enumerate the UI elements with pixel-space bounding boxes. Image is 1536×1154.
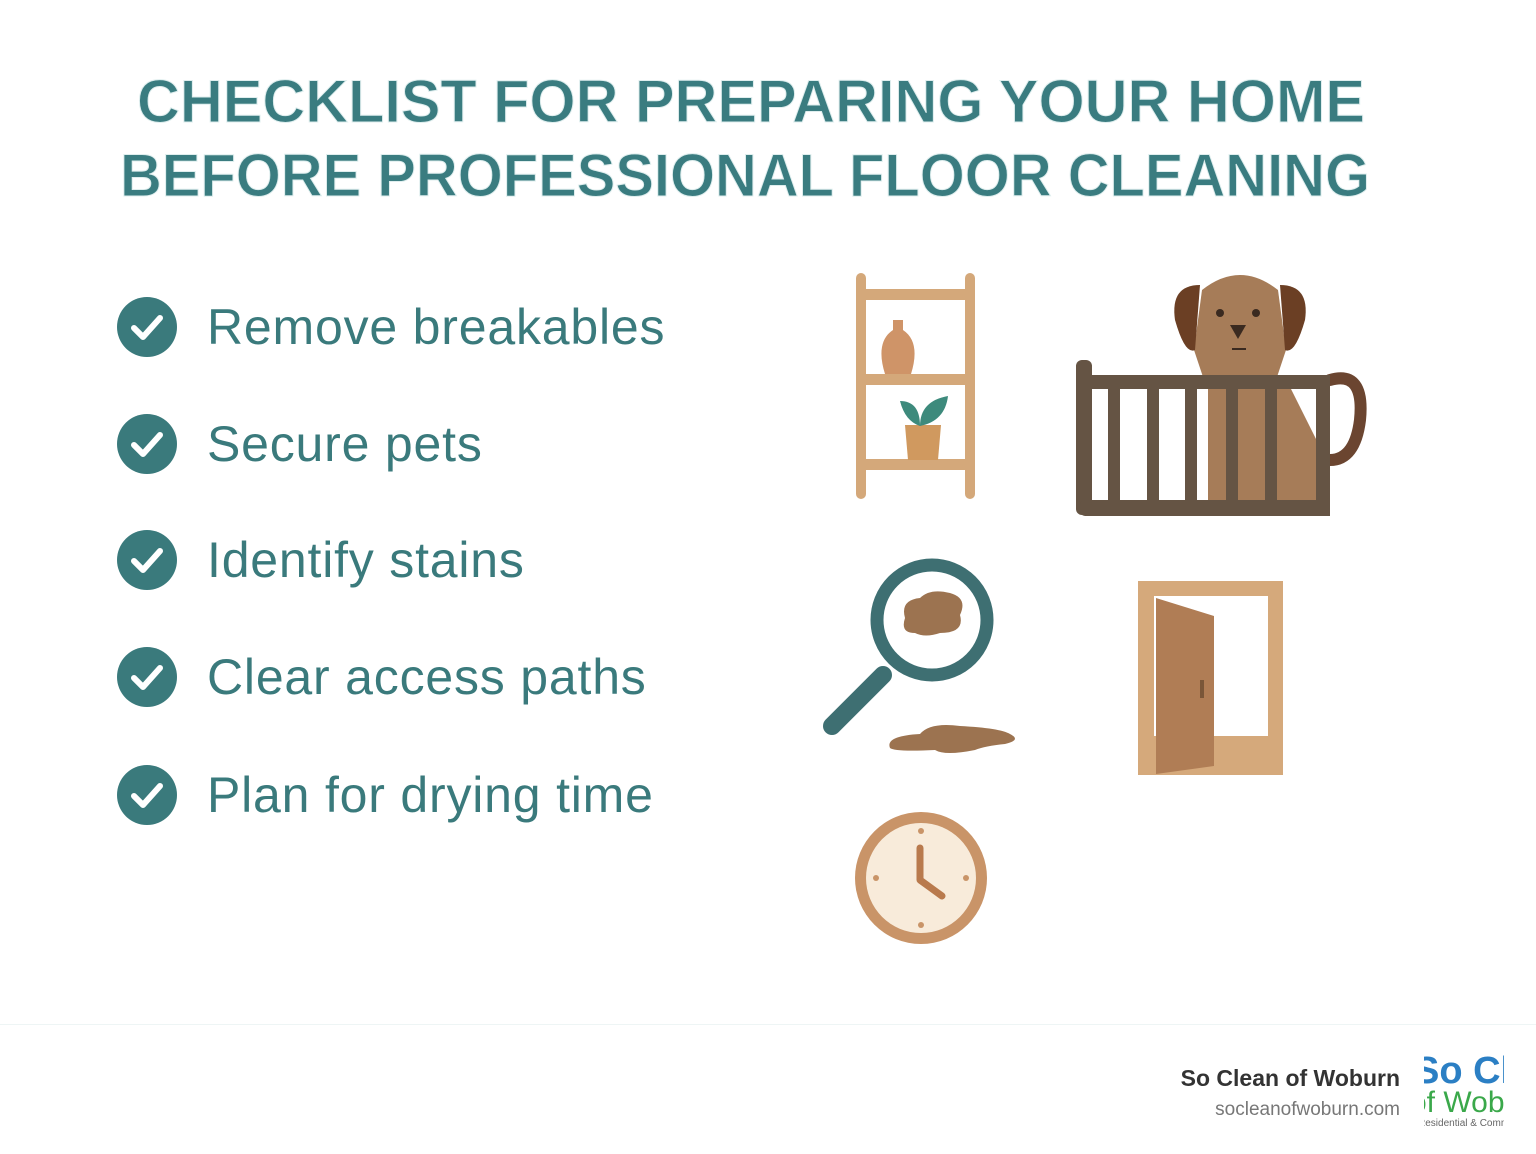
- footer divider: [0, 1024, 1536, 1025]
- icon: shelf: [856, 273, 975, 499]
- title: [120, 68, 1370, 209]
- title: CHECKLIST FOR PREPARING YOUR HOME: [137, 68, 1365, 135]
- icon: door: [1138, 581, 1283, 775]
- footer: brand text: [1181, 1065, 1400, 1120]
- footer: logo: [1424, 1050, 1504, 1129]
- checklist: [117, 297, 665, 825]
- icon: clock: [855, 812, 987, 944]
- item: identify stains: Identify stains: [207, 532, 525, 588]
- icon: dog behind gate: [1076, 275, 1361, 516]
- item: plan for drying time: Plan for drying time: [207, 767, 654, 823]
- item: remove breakables: Remove breakables: [207, 299, 665, 355]
- footer: brand text: socleanofwoburn.com: [1215, 1099, 1400, 1120]
- footer: brand text: So Clean of Woburn: [1181, 1065, 1400, 1091]
- item: clear access paths: Clear access paths: [207, 649, 647, 705]
- item: secure pets: Secure pets: [207, 416, 483, 472]
- title: BEFORE PROFESSIONAL FLOOR CLEANING: [120, 142, 1370, 209]
- icon: magnifier with stain: [832, 565, 1015, 753]
